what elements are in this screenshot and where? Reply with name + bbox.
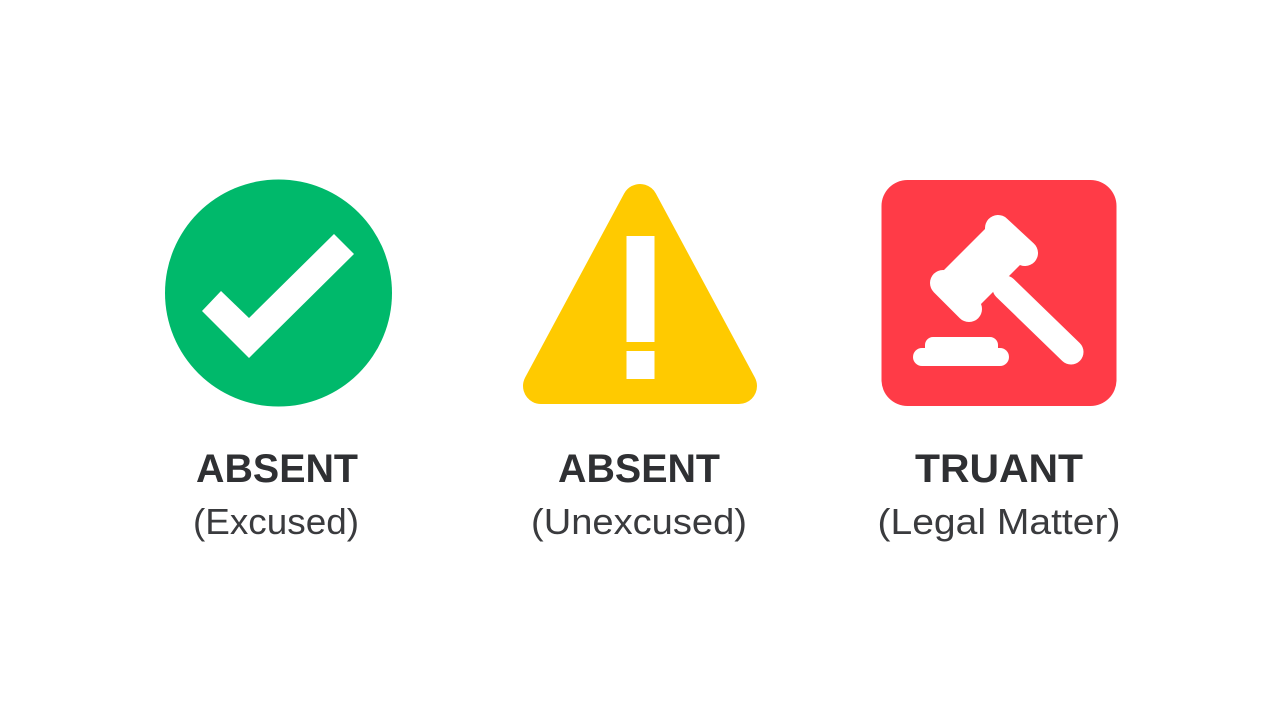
icon: green check circle (165, 180, 392, 406)
label: absent excused (193, 447, 359, 542)
label: absent excused: (Excused) (193, 501, 359, 542)
icon: red gavel square (882, 180, 1116, 406)
icon: yellow warning triangle (541, 202, 739, 386)
gavel handle (1005, 288, 1071, 352)
label: truant legal matter: (Legal Matter) (878, 501, 1120, 542)
gavel head (940, 224, 1025, 310)
label: absent unexcused: ABSENT (558, 447, 720, 491)
panel: absent excused (165, 180, 392, 542)
label: truant legal matter (878, 447, 1120, 542)
label: absent unexcused: (Unexcused) (531, 501, 747, 542)
panel: absent unexcused (531, 202, 747, 542)
gavel base (913, 337, 1009, 366)
label: absent excused: ABSENT (196, 447, 358, 491)
label: truant legal matter: TRUANT (915, 447, 1083, 491)
panel: truant legal matter (878, 180, 1120, 542)
label: absent unexcused (531, 447, 747, 542)
